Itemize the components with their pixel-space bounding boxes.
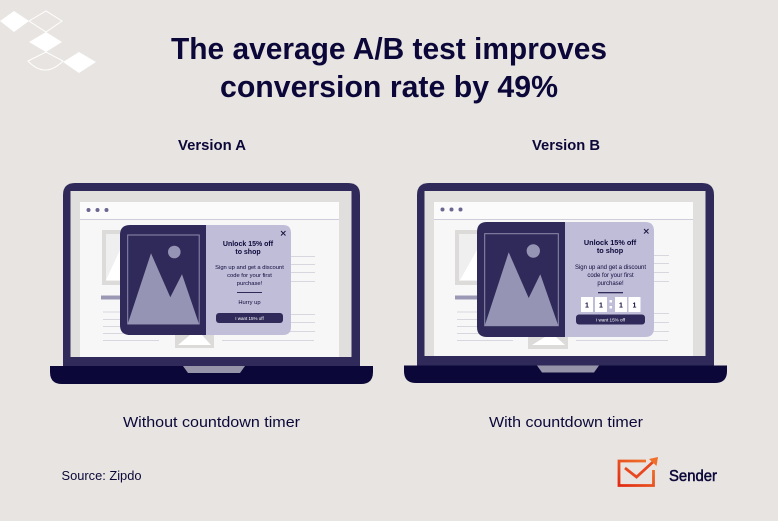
button B: I want 15% off — [596, 318, 626, 322]
popup B — [477, 222, 654, 337]
button B — [576, 314, 645, 324]
logo: Sender — [619, 457, 718, 486]
countdown timer: 1 — [633, 302, 637, 310]
title: The average A/B test improves — [171, 31, 607, 66]
countdown timer: 1 — [599, 302, 603, 310]
logo: Sender: Sender — [669, 468, 718, 485]
image placeholder A — [128, 235, 199, 324]
heading: Version A: Version A — [178, 138, 247, 154]
image placeholder B — [485, 234, 558, 326]
popup B text — [575, 238, 646, 293]
icon: decorative diamonds — [0, 11, 96, 73]
title: conversion rate by 49% — [220, 69, 558, 104]
popup B text: to shop — [597, 246, 624, 255]
laptop B — [404, 183, 727, 383]
popup B text: Sign up and get a discount — [575, 265, 646, 271]
close icon — [281, 231, 286, 236]
countdown timer: 1 — [585, 302, 589, 310]
countdown timer: 1 — [619, 302, 623, 310]
heading: Version B: Version B — [532, 138, 600, 154]
caption: without countdown timer: Without countdown timer — [123, 414, 300, 431]
popup A text: to shop — [235, 249, 261, 256]
popup A text: Unlock 15% off — [223, 241, 274, 248]
popup B text: purchase! — [597, 281, 624, 287]
popup A text: Sign up and get a discount — [215, 265, 284, 271]
popup B text: code for your first — [587, 273, 634, 279]
icon: envelope with arrow — [619, 457, 658, 486]
countdown timer — [581, 297, 640, 312]
laptop A — [50, 183, 373, 384]
title — [171, 31, 607, 104]
popup A text: purchase! — [237, 281, 263, 287]
close icon — [644, 229, 648, 234]
popup A text: code for your first — [227, 273, 272, 279]
button A — [216, 313, 283, 323]
source: Source: Zipdo — [62, 468, 142, 483]
caption: with countdown timer: With countdown timer — [489, 414, 643, 431]
button A: I want 15% off — [235, 316, 264, 321]
popup A text: Hurry up — [238, 300, 261, 306]
popup A — [120, 225, 291, 335]
popup B text: Unlock 15% off — [584, 238, 637, 247]
popup A text — [215, 241, 284, 306]
